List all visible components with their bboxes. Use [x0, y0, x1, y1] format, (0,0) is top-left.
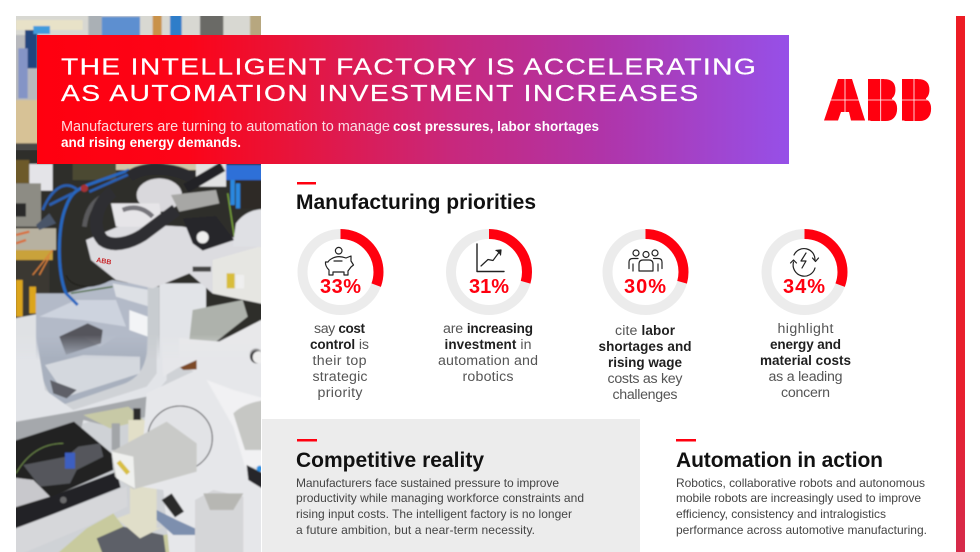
photo: factory robot welding car body	[16, 16, 261, 552]
subtitle: and rising energy demands.	[61, 135, 241, 150]
caption: automation and	[438, 353, 538, 369]
caption	[598, 323, 692, 403]
icon: people group	[629, 250, 662, 271]
caption: concern	[781, 385, 830, 401]
caption: cite labor	[615, 323, 676, 339]
panel: automation in action: Automation in action	[676, 449, 883, 472]
subtitle	[61, 119, 599, 150]
title: THE INTELLIGENT FACTORY IS ACCELERATING	[61, 55, 756, 80]
icon: growth chart	[477, 244, 504, 272]
ABB logo: B	[868, 67, 899, 133]
caption: control is	[310, 337, 369, 353]
text block: Manufacturers face sustained pressure to improve	[296, 476, 559, 490]
section: manufacturing priorities heading: Manufacturing priorities	[296, 191, 536, 214]
photo: factory robot welding car body: ABB	[96, 257, 112, 267]
panel: competitive reality	[296, 439, 584, 537]
ABB logo: A	[824, 68, 867, 134]
caption: their top	[312, 353, 367, 369]
stat: cost control 33%	[302, 234, 378, 401]
text block: rising input costs. The intelligent factory is no longer	[296, 507, 572, 521]
caption: energy and	[770, 337, 841, 352]
icon: piggy bank	[325, 247, 354, 275]
caption: as a leading	[768, 369, 842, 385]
caption: are increasing	[443, 321, 533, 337]
stat: energy 34%	[760, 234, 851, 401]
stat: energy 34%: 34%	[783, 276, 825, 298]
stat: investment 31%: 31%	[469, 276, 509, 298]
text block: mobile robots are increasingly used to improve	[676, 491, 921, 505]
panel: competitive reality background	[262, 419, 640, 552]
stat: labor 30%: 30%	[624, 276, 666, 298]
caption: rising wage	[608, 355, 682, 370]
caption: challenges	[612, 387, 678, 403]
donut chart 30%	[608, 234, 684, 310]
caption: strategic	[312, 369, 368, 385]
caption: robotics	[462, 369, 514, 385]
text block	[296, 476, 584, 537]
caption	[310, 321, 369, 401]
title: AS AUTOMATION INVESTMENT INCREASES	[61, 81, 698, 106]
donut chart 33%	[302, 234, 378, 310]
caption: highlight	[778, 321, 834, 337]
donut chart 31%	[451, 234, 527, 310]
title	[61, 55, 756, 106]
subtitle: Manufacturers are turning to automation to manage	[61, 119, 390, 135]
caption: costs as key	[608, 371, 683, 387]
caption: material costs	[760, 353, 851, 368]
text block: efficiency, consistency and intralogistics	[676, 507, 886, 521]
subtitle: cost pressures, labor shortages	[393, 119, 599, 134]
ABB logo	[824, 67, 933, 134]
stat: cost control 33%: 33%	[320, 276, 361, 298]
caption	[438, 321, 538, 385]
caption: priority	[318, 385, 363, 401]
text block: productivity while managing workforce constraints and	[296, 491, 584, 505]
right accent bar	[956, 16, 965, 552]
stat: labor 30%	[598, 234, 692, 403]
title banner	[37, 35, 789, 164]
icon: energy cycle	[790, 249, 818, 276]
donut chart 34%	[766, 234, 842, 310]
text block: Robotics, collaborative robots and autonomous	[676, 476, 925, 490]
panel: automation in action	[676, 439, 927, 537]
caption: say cost	[314, 321, 366, 337]
text block: performance across automotive manufacturing.	[676, 523, 927, 537]
caption	[760, 321, 851, 401]
panel: competitive reality: Competitive reality	[296, 449, 484, 472]
caption: investment in	[444, 337, 532, 353]
text block: a future ambition, but a near-term necessity.	[296, 523, 535, 537]
text block	[676, 476, 927, 537]
caption: shortages and	[598, 339, 692, 354]
stat: investment 31%	[438, 234, 538, 385]
ABB logo: B	[902, 67, 933, 133]
